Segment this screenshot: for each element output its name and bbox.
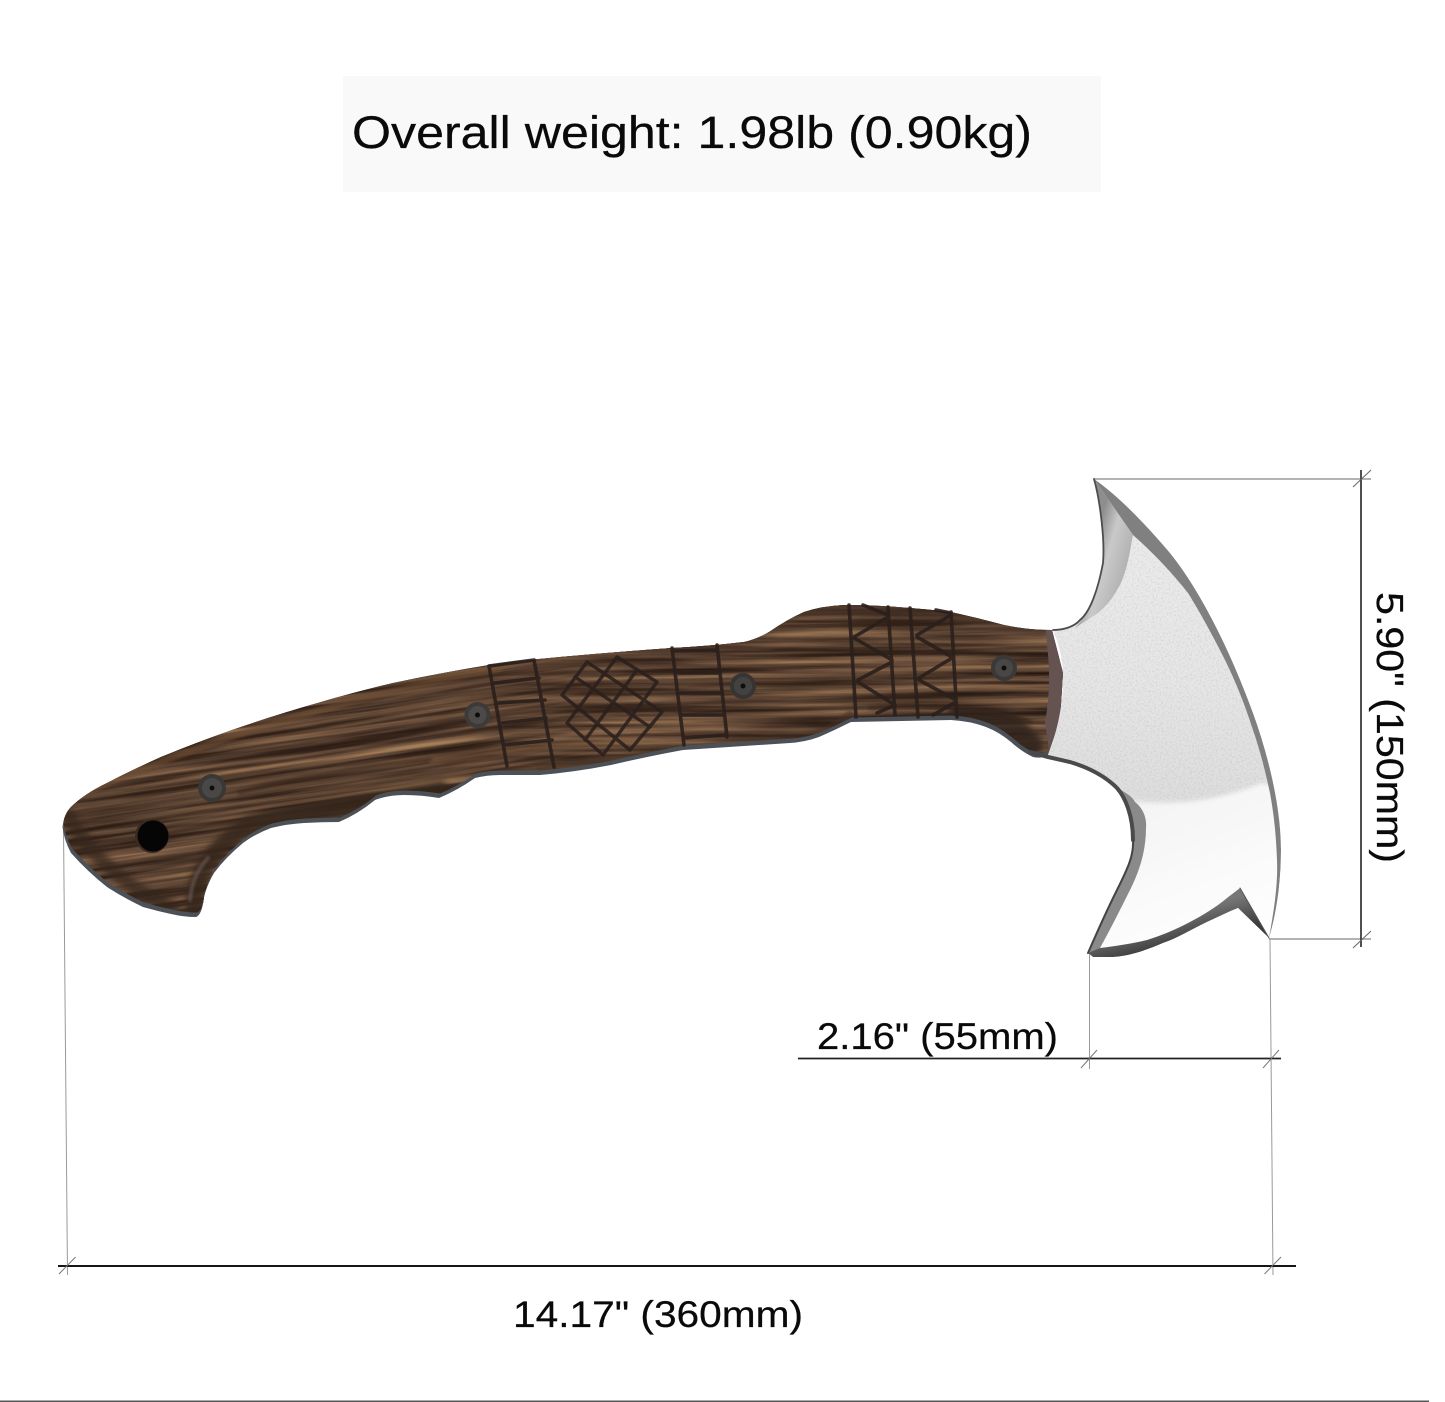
lower beard bevel [1088,788,1146,955]
carved zigzag band one [849,605,895,717]
extension lines [64,479,1371,1275]
overall weight label: Overall weight: 1.98lb (0.90kg) [352,107,1032,158]
handle pin one [198,774,226,802]
blade edge lines [1030,479,1269,953]
carved ladder right [672,645,727,745]
carved lattice diamond [562,657,662,755]
bottom edge bevel [1088,888,1269,957]
blade surface speckle [1050,537,1266,802]
width dimension 2.16 in [798,1016,1281,1068]
carved ladder left [489,660,554,767]
height dimension 5.90 in [1353,470,1410,948]
length dimension 14.17 in [58,1257,1296,1335]
handle end collar [1045,630,1063,750]
handle pin four [991,655,1017,681]
carved zigzag band two [910,608,957,717]
axe illustration [0,430,1290,1042]
height label: 5.90" (150mm) [1368,592,1410,863]
handle pin two [464,702,490,728]
handle steel tang [62,605,1063,917]
polished lower reflection [1090,782,1277,954]
length label: 14.17" (360mm) [513,1294,803,1335]
wooden handle [64,605,1063,912]
lanyard hole [135,819,169,853]
bottom border line [0,1400,1429,1402]
steel blade [1048,480,1281,957]
width label: 2.16" (55mm) [817,1016,1058,1057]
wood shading [68,610,1040,915]
upper beard grind [1075,479,1133,628]
handle pin three [730,673,756,699]
weight panel [343,76,1101,192]
outer cutting bevel [1094,479,1281,938]
